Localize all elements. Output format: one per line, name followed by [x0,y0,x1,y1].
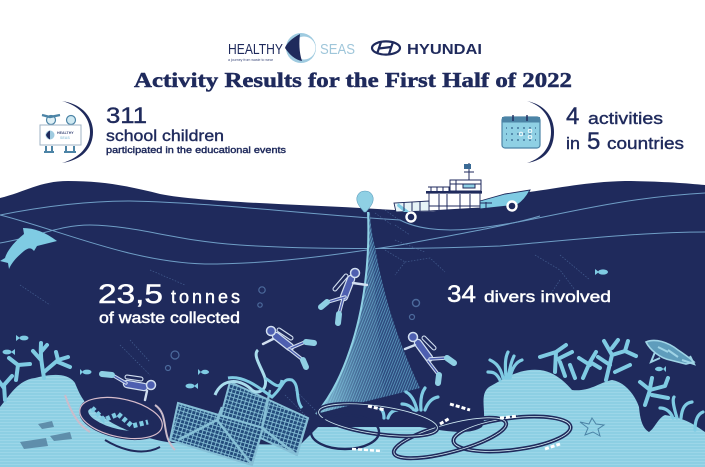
stat: school children: school children [106,128,224,145]
icon: children with sign: SEAS [60,136,70,140]
faint contour texture [20,210,590,420]
water current lines [0,193,705,264]
ghost net ropes [215,350,266,395]
stat: waste collected: of waste collected [99,310,240,327]
stat: waste collected [98,279,240,327]
stat: activities and countries: activities [588,109,663,128]
sea floor and reefs [0,370,705,467]
stat: activities and countries [502,101,684,163]
stat: waste collected: 23,5 [98,279,163,309]
stat: activities and countries: 4 [566,103,579,130]
logo: Hyundai [372,41,482,58]
logo: Hyundai: HYUNDAI [407,42,482,58]
stat: school children: participated in the educational events [106,145,287,155]
diver 1 [321,268,367,323]
starfish [580,418,604,436]
stat: divers involved: 34 [447,281,476,308]
corals and sea grass [0,340,703,430]
stat: school children [40,101,287,163]
buoy [357,191,373,212]
diver 2 [263,326,314,367]
logo: Healthy Seas: SEAS [320,42,355,58]
air bubbles [166,287,420,370]
divers [102,268,454,400]
logo: Healthy Seas: a journey from waste to wear [228,58,274,62]
small dark shells on sand [20,421,72,449]
icon: children with sign: HEALTHY [57,131,74,135]
icon: children with sign [40,101,93,163]
stat: waste collected: tonnes [171,287,240,307]
right corals [540,345,572,376]
ghost fishing rings [311,398,573,467]
stat: activities and countries: in [566,134,580,153]
stat: activities and countries: 5 [587,128,600,155]
sea background [0,181,705,467]
icon: calendar [502,101,554,163]
title: Activity Results for the First Half of 2022 [134,68,572,92]
stat: divers involved [447,281,611,308]
diver 4 [405,332,454,383]
dolphin [0,228,57,269]
hull [394,190,530,228]
fishing net [316,212,420,414]
sea grass [488,352,522,380]
seabed waste: rope tangle and tyre [65,391,175,451]
stat: divers involved: divers involved [484,289,611,306]
superstructure [429,193,480,211]
left coral [33,343,70,378]
logo: Healthy Seas: HEALTHY [228,42,283,58]
small fish [2,269,666,389]
diver 3 [102,374,156,400]
ship [394,163,530,228]
logo: Healthy Seas [228,33,355,63]
stat: school children: 311 [106,103,147,128]
lobster traps [170,350,308,465]
sea turtle [646,340,694,364]
life rings [406,212,416,222]
stat: activities and countries: countries [607,134,684,153]
